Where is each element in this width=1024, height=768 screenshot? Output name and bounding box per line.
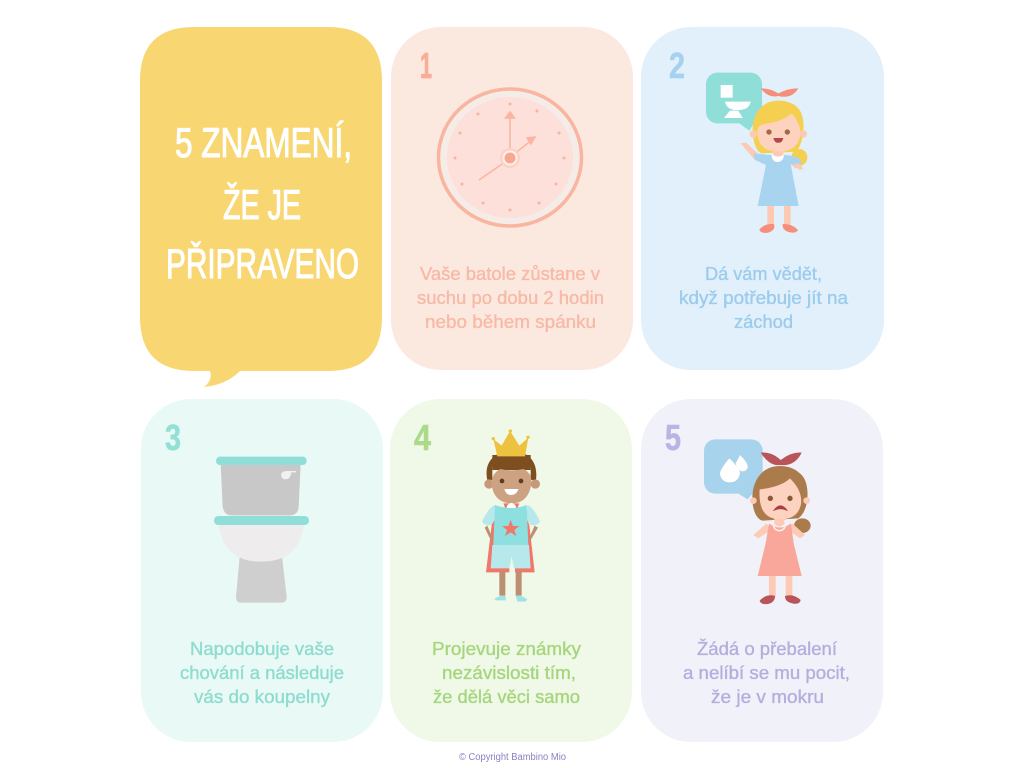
text: sign 1: Vaše batole zůstane v	[420, 264, 600, 284]
panel: title speech bubble	[140, 27, 382, 387]
icon: speech bubble with drops	[704, 439, 763, 499]
text: sign 4: nezávislosti tím,	[442, 663, 576, 683]
text: sign 5: že je v mokru	[711, 687, 824, 707]
text: sign 2	[679, 264, 849, 332]
text: sign 1: suchu po dobu 2 hodin	[417, 288, 604, 308]
text: sign 1: nebo během spánku	[425, 312, 596, 332]
text: sign 2: když potřebuje jít na	[679, 288, 849, 308]
text: sign 2: Dá vám vědět,	[705, 264, 822, 284]
number 4: 4	[414, 417, 431, 458]
number 3: 3	[165, 417, 181, 458]
text: sign 5	[683, 639, 850, 707]
number 1: 1	[420, 45, 432, 86]
text: sign 4	[432, 639, 581, 707]
text: sign 3: chování a následuje	[180, 663, 344, 683]
heading: title: PŘIPRAVENO	[166, 240, 359, 287]
panel: sign 5 wet discomfort	[641, 399, 883, 742]
text: sign 3: vás do koupelny	[194, 687, 330, 707]
icon: blonde girl with toilet speech bubble	[706, 73, 807, 233]
icon: clock	[438, 89, 582, 226]
heading: title: 5 ZNAMENÍ,	[175, 119, 352, 166]
icon: brown-haired girl with water drops speech bubble	[704, 439, 811, 604]
text: sign 2: záchod	[734, 312, 793, 332]
number 5: 5	[665, 417, 681, 458]
text: sign 3	[180, 639, 344, 707]
panel: sign 1 clock	[391, 27, 633, 370]
heading: title	[166, 119, 359, 287]
panel: sign 3 imitates	[141, 399, 383, 742]
number 2: 2	[669, 45, 685, 86]
text: sign 3: Napodobuje vaše	[190, 639, 334, 659]
text: sign 4: že dělá věci samo	[433, 687, 580, 707]
text: sign 5: Žádá o přebalení	[697, 639, 837, 659]
icon: toilet	[214, 457, 309, 603]
text: sign 5: a nelíbí se mu pocit,	[683, 663, 850, 683]
icon: boy with crown and cape	[482, 429, 540, 602]
text: sign 1	[417, 264, 604, 332]
copyright: © Copyright Bambino Mio	[459, 752, 566, 763]
panel: sign 4 independence	[390, 399, 632, 742]
panel: sign 2 tells you	[641, 27, 884, 370]
heading: title: ŽE JE	[223, 181, 301, 228]
text: sign 4: Projevuje známky	[432, 639, 581, 659]
icon: speech bubble with toilet	[706, 73, 762, 131]
